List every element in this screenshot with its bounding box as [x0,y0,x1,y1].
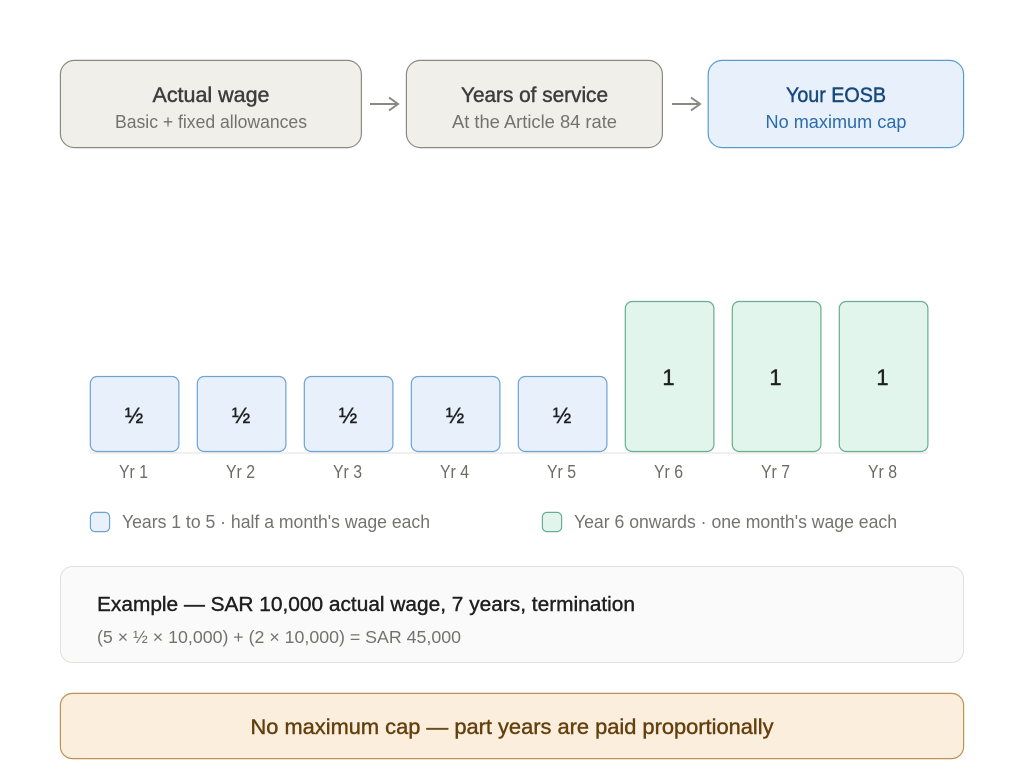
bar chart: accrual by year [90,302,928,482]
bar: year 5 [518,376,607,482]
flow box: years of service [406,60,662,148]
panel: worked example: Example — SAR 10,000 actual wage, 7 years, termination [97,593,635,616]
legend: years 1 to 5: Years 1 to 5 · half a month's wage each [122,512,430,532]
bar: year 1: ½ [125,403,143,428]
bar: year 3: Yr 3 [333,462,362,482]
bar: year 8 [839,302,928,482]
flow box: actual wage [60,60,361,148]
bar: year 4: ½ [446,403,464,428]
flow box: years of service: At the Article 84 rate [452,112,617,132]
bar: year 6: 1 [662,365,675,390]
bar: year 1 [90,376,179,482]
bar: year 2 [197,376,286,482]
bar: year 6: Yr 6 [654,462,683,482]
bar: year 8: Yr 8 [868,462,897,482]
bar: year 2: ½ [232,403,250,428]
bar: year 7: 1 [769,365,782,390]
bar: year 8: 1 [876,365,889,390]
flow box: actual wage: Basic + fixed allowances [115,112,307,132]
flow box: your EOSB: No maximum cap [766,112,906,132]
arrow: wage to years [370,98,398,110]
panel: worked example: (5 × ½ × 10,000) + (2 × 10,000) = SAR 45,000 [97,627,461,647]
bar: year 7 [732,302,821,482]
panel: worked example [60,566,964,662]
callout: no maximum cap [60,693,964,759]
legend: year 6 onwards: Year 6 onwards · one month's wage each [574,512,897,532]
bar: year 4 [411,376,500,482]
bar: year 5: ½ [553,403,571,428]
bar: year 2: Yr 2 [226,462,255,482]
bar: year 6 [625,302,714,482]
flow box: years of service: Years of service [461,84,608,107]
bar: year 3: ½ [339,403,357,428]
callout: no maximum cap: No maximum cap — part years are paid proportionally [250,716,774,739]
flow box: actual wage: Actual wage [152,84,270,107]
bar: year 1: Yr 1 [119,462,148,482]
flow box: your EOSB: Your EOSB [786,84,886,107]
bar: year 5: Yr 5 [547,462,576,482]
flow box: your EOSB [708,60,964,148]
bar: year 3 [304,376,393,482]
arrow: years to EOSB [672,98,700,110]
bar: year 4: Yr 4 [440,462,469,482]
bar: year 7: Yr 7 [761,462,790,482]
